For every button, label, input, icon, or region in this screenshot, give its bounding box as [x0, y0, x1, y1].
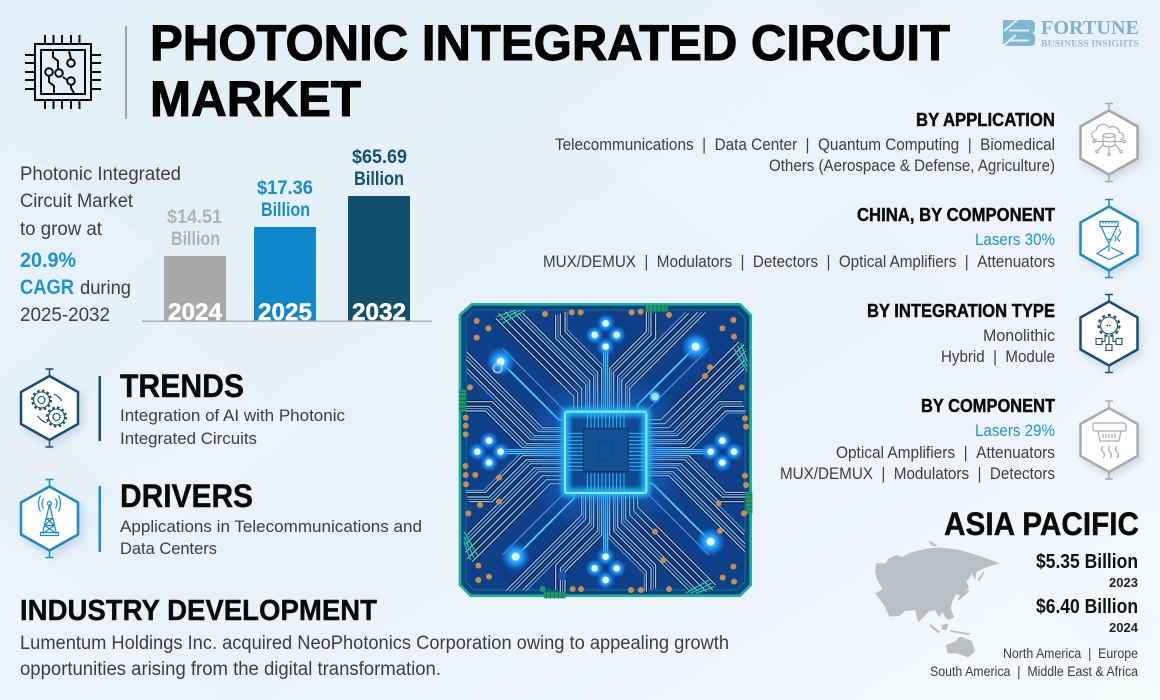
block: by application: Telecommunications | Data Center | Quantum Computing | Biomedical [555, 136, 1055, 154]
text: industry development: opportunities arising from the digital transformation. [20, 659, 441, 680]
bar 2025: $17.36 [257, 178, 313, 199]
icon: trends gears hexagon [21, 369, 78, 447]
block: by component: Optical Amplifiers | Attenuators [836, 444, 1055, 462]
title: MARKET [150, 71, 361, 127]
block: by component: MUX/DEMUX | Modulators | Detectors [780, 465, 1055, 483]
block: by integration type: BY INTEGRATION TYPE [867, 301, 1055, 321]
text: trends [120, 368, 345, 448]
block: by component: BY COMPONENT [921, 396, 1055, 416]
block: by integration type: Monolithic [983, 327, 1055, 345]
icon: gear network hexagon [1080, 294, 1138, 372]
bar 2024: Billion [171, 229, 220, 250]
text: trends: TRENDS [120, 368, 244, 404]
stats: Asia Pacific values [1036, 551, 1139, 635]
text: CAGR summary: to grow at [20, 218, 103, 240]
text: CAGR summary: 20.9% [20, 249, 76, 272]
block: by integration type [867, 301, 1055, 366]
bar 2032: Billion [354, 169, 404, 190]
bar 2025 [254, 178, 316, 326]
text: CAGR summary: during [80, 277, 131, 299]
icon: circuit chip [25, 35, 101, 109]
block: china by component [543, 205, 1055, 271]
bar 2032 [348, 147, 410, 326]
text: drivers [120, 478, 422, 558]
icon: drivers tower hexagon [21, 480, 78, 558]
logo: Fortune Business Insights: FORTUNE [1041, 18, 1139, 39]
bar 2024: $14.51 [167, 207, 222, 228]
text: CAGR summary: 2025-2032 [20, 304, 110, 326]
stats: Asia Pacific values: 2023 [1109, 575, 1138, 590]
header divider [125, 26, 127, 119]
block: by application: BY APPLICATION [916, 110, 1055, 130]
block: china by component: CHINA, BY COMPONENT [857, 205, 1055, 225]
icon: cloud database hexagon [1080, 104, 1138, 182]
text: trends: Integration of AI with Photonic [120, 406, 345, 425]
text: other regions: North America | Europe [1003, 646, 1138, 661]
divider: drivers [98, 486, 101, 552]
region title: Asia Pacific: ASIA PACIFIC [944, 506, 1139, 542]
illustration: glowing circuit board [459, 304, 752, 598]
block: by component [780, 396, 1055, 483]
stats: Asia Pacific values: $5.35 Billion [1036, 551, 1138, 573]
text: trends: Integrated Circuits [120, 429, 257, 448]
stats: Asia Pacific values: 2024 [1109, 620, 1139, 635]
bar 2024 [164, 207, 226, 326]
text: other regions [930, 646, 1138, 679]
bar 2025: 2025 [258, 299, 312, 326]
logo: Fortune Business Insights [1003, 18, 1139, 48]
bar 2024: 2024 [168, 299, 223, 326]
bar 2025: Billion [261, 200, 310, 221]
block: china by component: MUX/DEMUX | Modulators | Detectors | Optical Amplifiers | Attenuators [543, 253, 1055, 271]
bar chart: market size [142, 147, 432, 326]
block: by integration type: Hybrid | Module [941, 348, 1055, 366]
block: by component: Lasers 29% [975, 422, 1055, 440]
text: drivers: Applications in Telecommunications and [120, 517, 422, 536]
map: Asia Pacific [875, 540, 1000, 657]
divider: trends [98, 376, 101, 441]
stats: Asia Pacific values: $6.40 Billion [1036, 596, 1138, 618]
text: CAGR summary: CAGR [20, 276, 74, 299]
text: drivers: DRIVERS [120, 478, 253, 514]
icon: laser hexagon [1080, 200, 1138, 278]
title [150, 15, 950, 127]
text: drivers: Data Centers [120, 539, 217, 558]
icon: sensor hexagon [1080, 401, 1138, 479]
block: china by component: Lasers 30% [975, 231, 1055, 249]
title: PHOTONIC INTEGRATED CIRCUIT [150, 15, 950, 71]
logo: Fortune Business Insights: BUSINESS INSIGHTS [1041, 38, 1139, 48]
text: industry development: Lumentum Holdings Inc. acquired NeoPhotonics Corporation owing to appealing growth [20, 633, 729, 654]
text: industry development: INDUSTRY DEVELOPMENT [20, 595, 377, 627]
text: CAGR summary: Photonic Integrated [20, 163, 181, 185]
text: CAGR summary: Circuit Market [20, 190, 134, 212]
text: CAGR summary [20, 163, 181, 326]
block: by application [555, 110, 1055, 175]
bar 2032: $65.69 [352, 147, 407, 168]
block: by application: Others (Aerospace & Defense, Agriculture) [769, 157, 1055, 175]
bar 2032: 2032 [352, 299, 406, 326]
text: other regions: South America | Middle East & Africa [930, 664, 1138, 679]
text: industry development [20, 595, 729, 680]
